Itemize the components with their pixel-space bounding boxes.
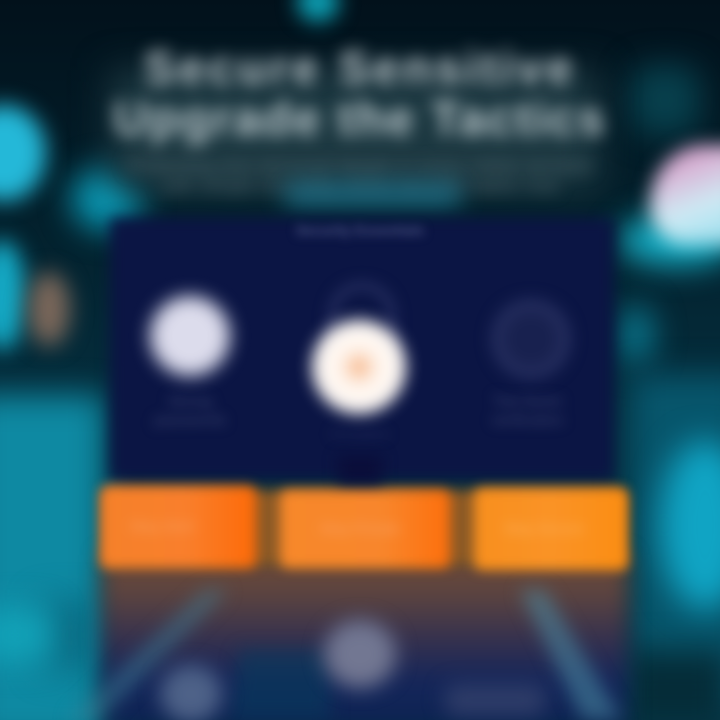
highlight glow under subtitle [285,182,460,208]
title glow [110,70,600,190]
lower panel gradient [102,555,628,720]
orange box 2 [280,490,450,568]
subtitle: Protecting your personal details in every online account [128,156,592,176]
icon: light circle [150,296,230,376]
title: Upgrade the Tactics [113,93,607,146]
caption: second column: Encryption [332,427,388,441]
panel notch [338,455,382,483]
icon: padlock [299,280,419,426]
orange band behind boxes [104,490,624,566]
orange box 3 [474,488,628,570]
orange box 1: Stay Alert [130,518,195,534]
icon: rainbow arc at right edge [650,145,720,245]
title: Secure Sensitive [144,41,576,94]
icon: lower left blob [160,665,222,720]
panel: navy central panel [110,218,614,480]
caption: third column: verification [492,412,563,429]
caption: third column: Two-factor [492,393,563,410]
padlock body [312,320,406,414]
caption: third column [492,393,563,429]
icon: lower right blob [445,684,545,716]
caption: first column [154,393,226,429]
caption: first column: passwords [154,412,226,429]
panel heading: Security Essentials [296,222,424,238]
subtitle [128,156,592,196]
caption: first column: Strong [168,393,212,410]
subtitle: with simple everyday online security habits now [162,176,558,196]
icon: dim outlined circle [492,300,570,378]
orange box 2: Stay Private [320,520,400,536]
orange box 3: Stay Secure [504,520,584,536]
orange box 1 [100,486,256,568]
padlock shackle [328,282,396,358]
title [104,40,612,155]
icon: lower centre blob [324,620,396,688]
